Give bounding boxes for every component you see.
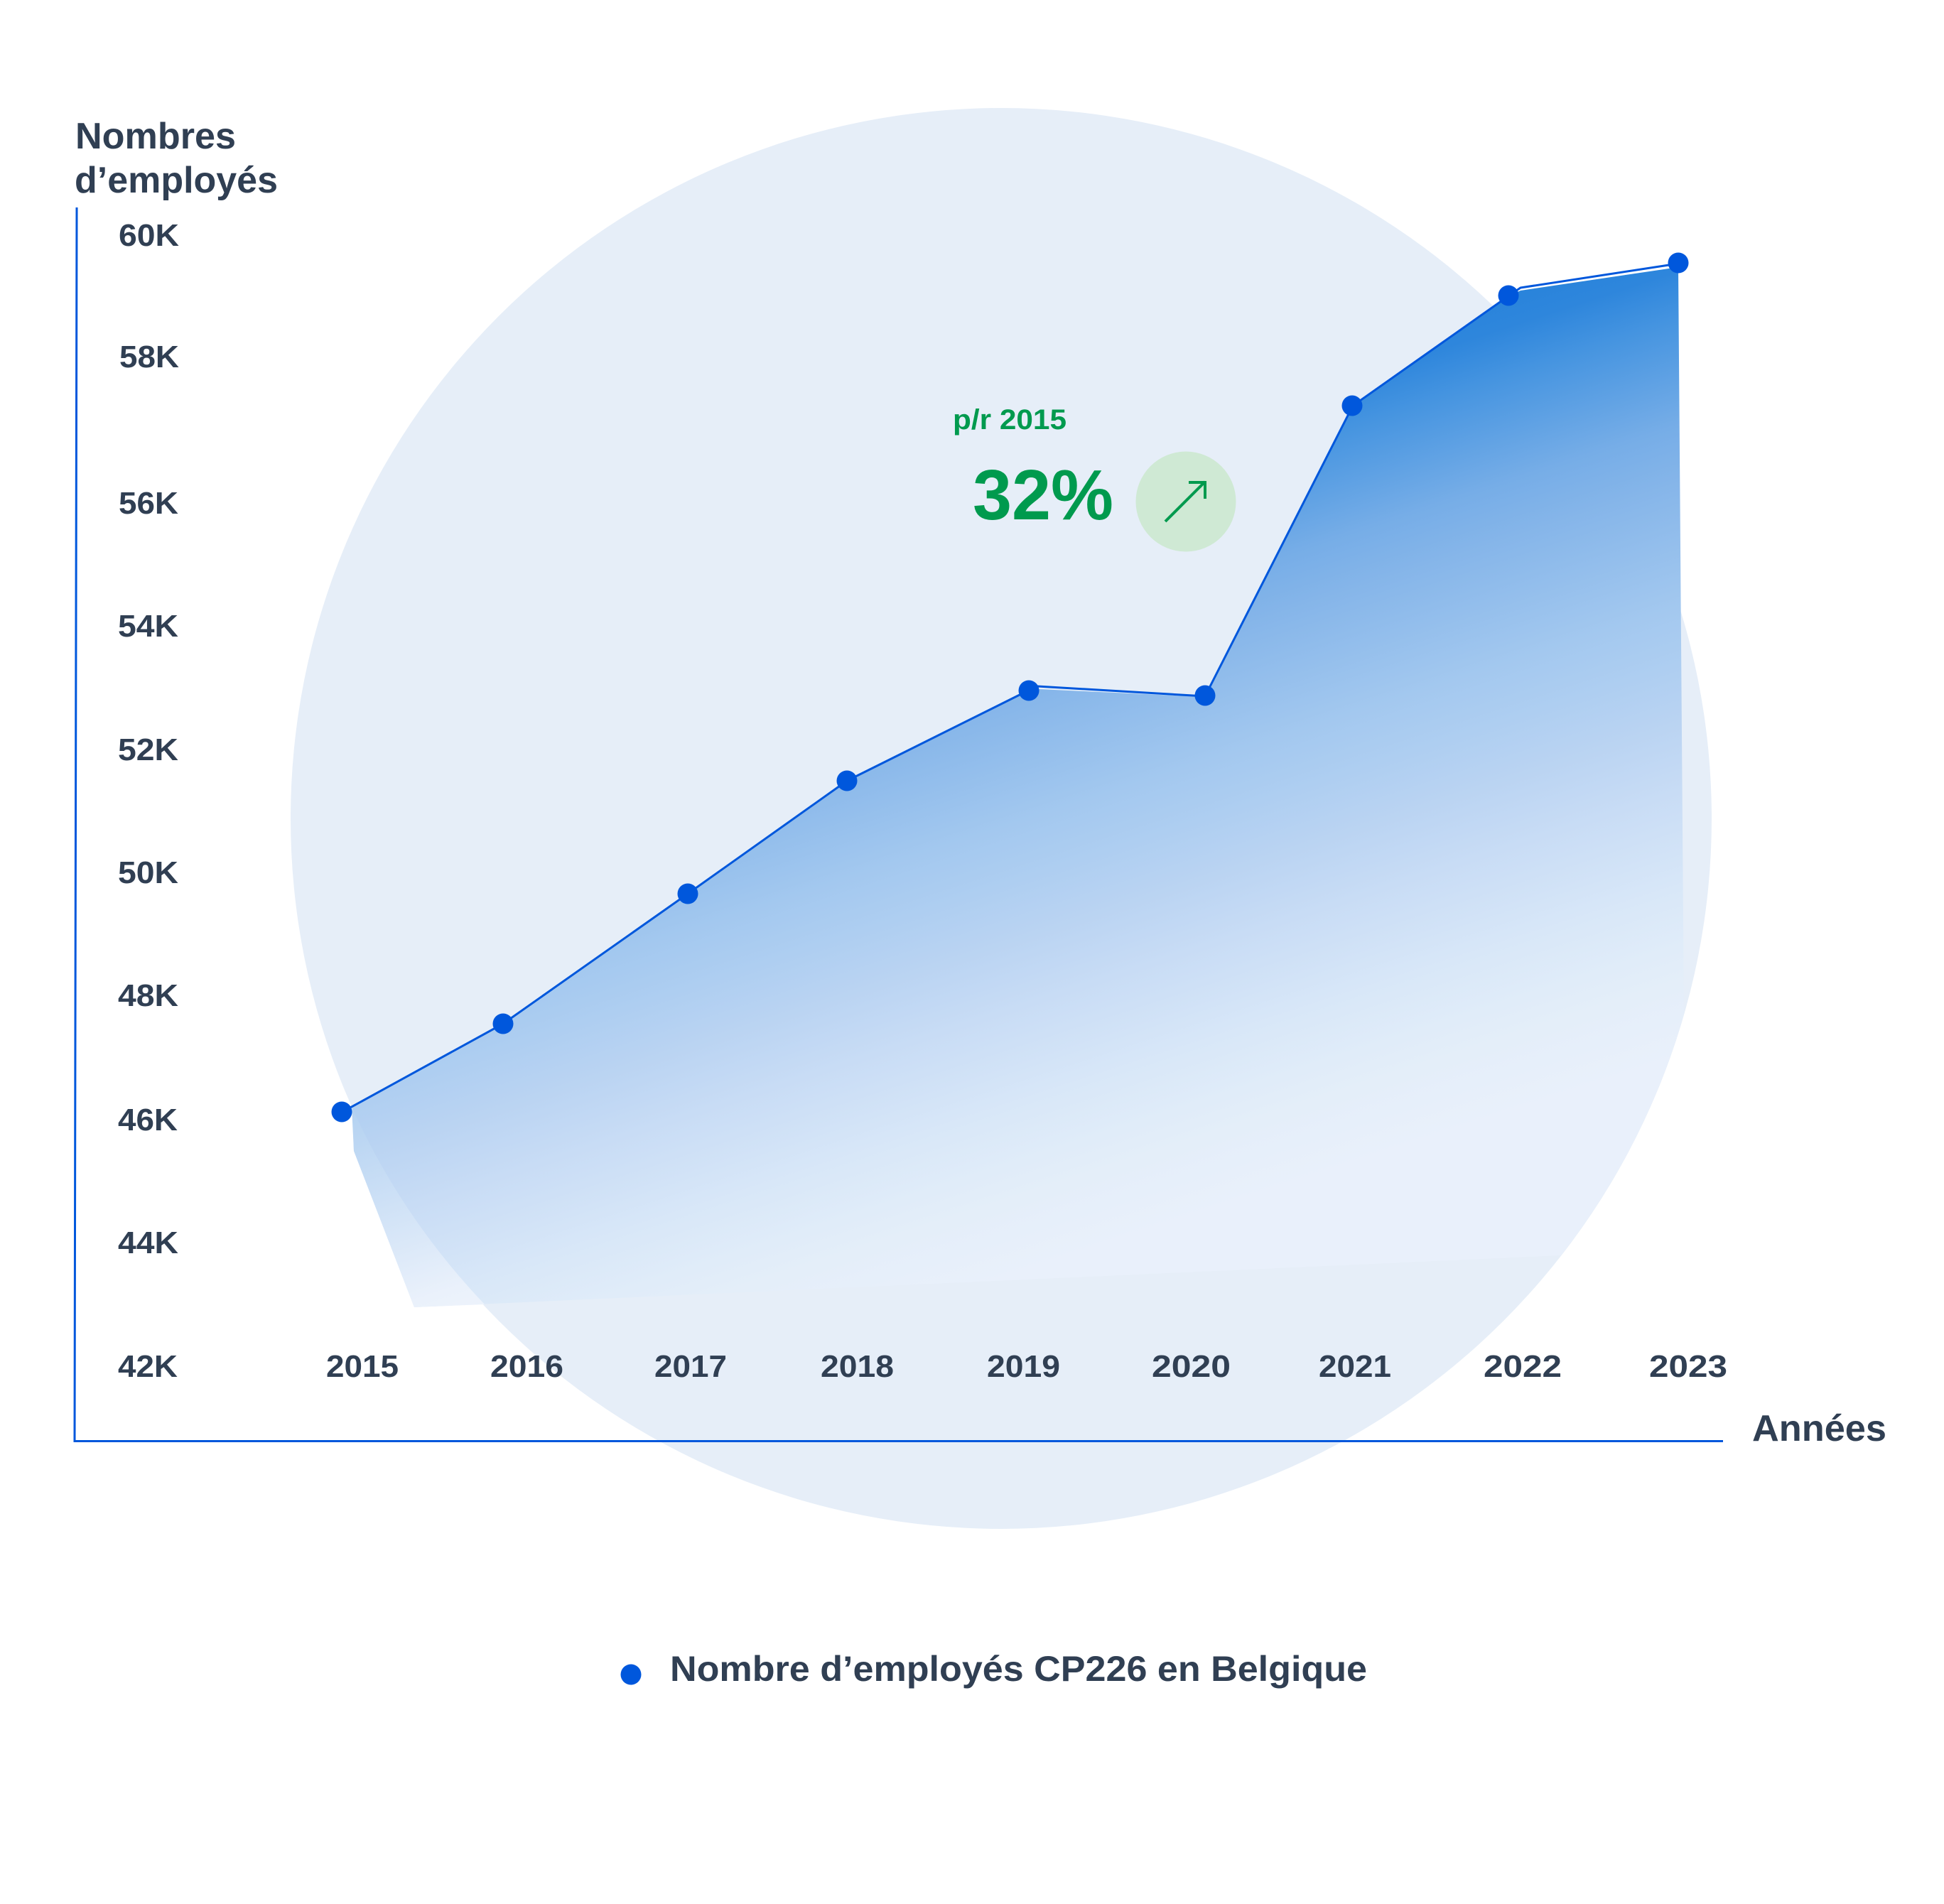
- callout value: 32%: [973, 455, 1113, 535]
- x axis labels: 2016: [490, 1349, 563, 1384]
- legend label: Nombre d’employés CP226 en Belgique: [670, 1649, 1367, 1689]
- x axis labels: 2017: [654, 1349, 727, 1384]
- y axis labels: 54K: [118, 609, 178, 644]
- x axis labels: 2018: [821, 1349, 894, 1384]
- y axis labels: 44K: [118, 1226, 178, 1260]
- x axis labels: 2020: [1152, 1349, 1231, 1384]
- y axis labels: 50K: [118, 855, 178, 890]
- callout caption: p/r 2015: [953, 404, 1066, 436]
- y axis title: Nombres: [75, 116, 236, 157]
- y axis title: d’employés: [75, 160, 278, 201]
- y axis labels: 52K: [118, 732, 178, 767]
- y axis labels: 42K: [118, 1349, 178, 1384]
- x axis title: Années: [1752, 1408, 1886, 1449]
- legend: [621, 1649, 1367, 1689]
- x axis labels: 2019: [987, 1349, 1060, 1384]
- x axis labels: 2015: [326, 1349, 399, 1384]
- y axis labels: 58K: [119, 340, 179, 374]
- data points: [331, 253, 1688, 1123]
- y axis labels: 56K: [119, 486, 178, 521]
- legend marker: [621, 1664, 641, 1685]
- data line: [342, 264, 1678, 1112]
- background circle: [291, 108, 1712, 1529]
- y axis labels: [118, 218, 179, 1384]
- y axis labels: 46K: [118, 1103, 178, 1137]
- x axis labels: [326, 1349, 1727, 1384]
- area under the line: [352, 267, 1684, 1307]
- x axis labels: 2022: [1484, 1349, 1562, 1384]
- y axis labels: 60K: [119, 218, 179, 253]
- x axis labels: 2023: [1649, 1349, 1727, 1384]
- y axis title: [75, 116, 278, 201]
- x axis labels: 2021: [1319, 1349, 1391, 1384]
- y axis labels: 48K: [118, 978, 178, 1013]
- icon: up arrow badge: [1135, 452, 1236, 551]
- chart axes: [75, 207, 1723, 1441]
- callout: growth compared to 2015: [953, 404, 1236, 551]
